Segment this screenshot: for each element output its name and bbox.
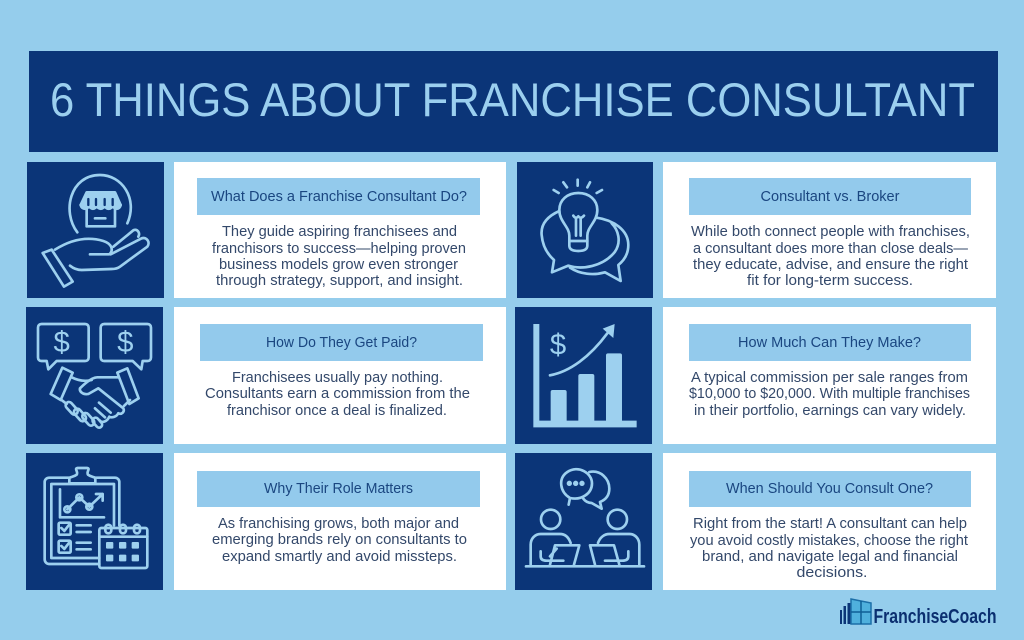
heading pill: What Does a Franchise Consultant Do? [211, 189, 467, 205]
heading pill [197, 178, 480, 215]
heading pill: When Should You Consult One? [726, 481, 933, 497]
body text: Franchisees usually pay nothing. [232, 370, 443, 386]
body text: As franchising grows, both major and [218, 516, 459, 532]
body text [212, 224, 466, 289]
body text [689, 370, 970, 419]
heading pill [689, 178, 971, 215]
heading pill [689, 324, 971, 361]
body text: While both connect people with franchises, [691, 224, 970, 240]
body text: franchisor once a deal is finalized. [227, 403, 447, 419]
panel: consultant vs broker [517, 162, 996, 298]
body text [691, 224, 970, 289]
title banner [29, 51, 998, 152]
icon: hand holding storefront [27, 162, 164, 298]
panel: why their role matters [26, 453, 506, 590]
heading pill [689, 471, 971, 507]
heading pill: Why Their Role Matters [264, 481, 413, 497]
icon: handshake with dollar bubbles [26, 307, 163, 444]
body text: Right from the start! A consultant can help [693, 516, 967, 532]
body text: decisions. [796, 565, 868, 581]
body text: through strategy, support, and insight. [216, 273, 463, 289]
heading pill [197, 471, 480, 507]
body text [690, 516, 968, 581]
body text: a consultant does more than close deals— [693, 241, 968, 257]
body text: emerging brands rely on consultants to [212, 532, 467, 548]
panel: what does a franchise consultant do [27, 162, 506, 298]
icon: handshake with dollar bubbles: $ [117, 326, 133, 359]
body text: you avoid costly mistakes, choose the right [690, 533, 968, 549]
icon: rising bar chart with dollar [515, 307, 652, 444]
icon: clipboard chart with calendar [26, 453, 163, 590]
logo: FranchiseCoach [840, 599, 996, 628]
body text [205, 370, 470, 419]
body text: they educate, advise, and ensure the right [693, 257, 968, 273]
body text: fit for long-term success. [747, 273, 913, 289]
body text: expand smartly and avoid missteps. [222, 549, 457, 565]
body text: business models grow even stronger [219, 257, 458, 273]
text card [174, 307, 506, 444]
heading pill: How Do They Get Paid? [266, 335, 417, 351]
heading pill: Consultant vs. Broker [760, 189, 900, 205]
text card [663, 162, 996, 298]
icon: handshake with dollar bubbles: $ [54, 326, 70, 359]
panel: how much can they make [515, 307, 996, 444]
body text: They guide aspiring franchisees and [222, 224, 457, 240]
title banner: 6 THINGS ABOUT FRANCHISE CONSULTANT [50, 73, 975, 126]
text card [174, 453, 506, 590]
text card [663, 453, 996, 590]
icon: light bulb with speech bubbles [517, 162, 653, 298]
body text: brand, and navigate legal and financial [702, 549, 958, 565]
panel: when should you consult one [515, 453, 996, 590]
body text: in their portfolio, earnings can vary widely. [694, 403, 966, 419]
text card [663, 307, 996, 444]
icon: rising bar chart with dollar: $ [550, 329, 566, 362]
body text [212, 516, 467, 565]
heading pill [200, 324, 483, 361]
icon: two people talking at laptops [515, 453, 652, 590]
icon: window and bars mark [840, 599, 871, 624]
text card [174, 162, 506, 298]
heading pill: How Much Can They Make? [738, 335, 921, 351]
body text: A typical commission per sale ranges from [691, 370, 968, 386]
body text: Consultants earn a commission from the [205, 386, 470, 402]
body text: $10,000 to $20,000. With multiple franchises [689, 386, 970, 402]
panel: how do they get paid [26, 307, 506, 444]
body text: franchisors to success—helping proven [212, 241, 466, 257]
